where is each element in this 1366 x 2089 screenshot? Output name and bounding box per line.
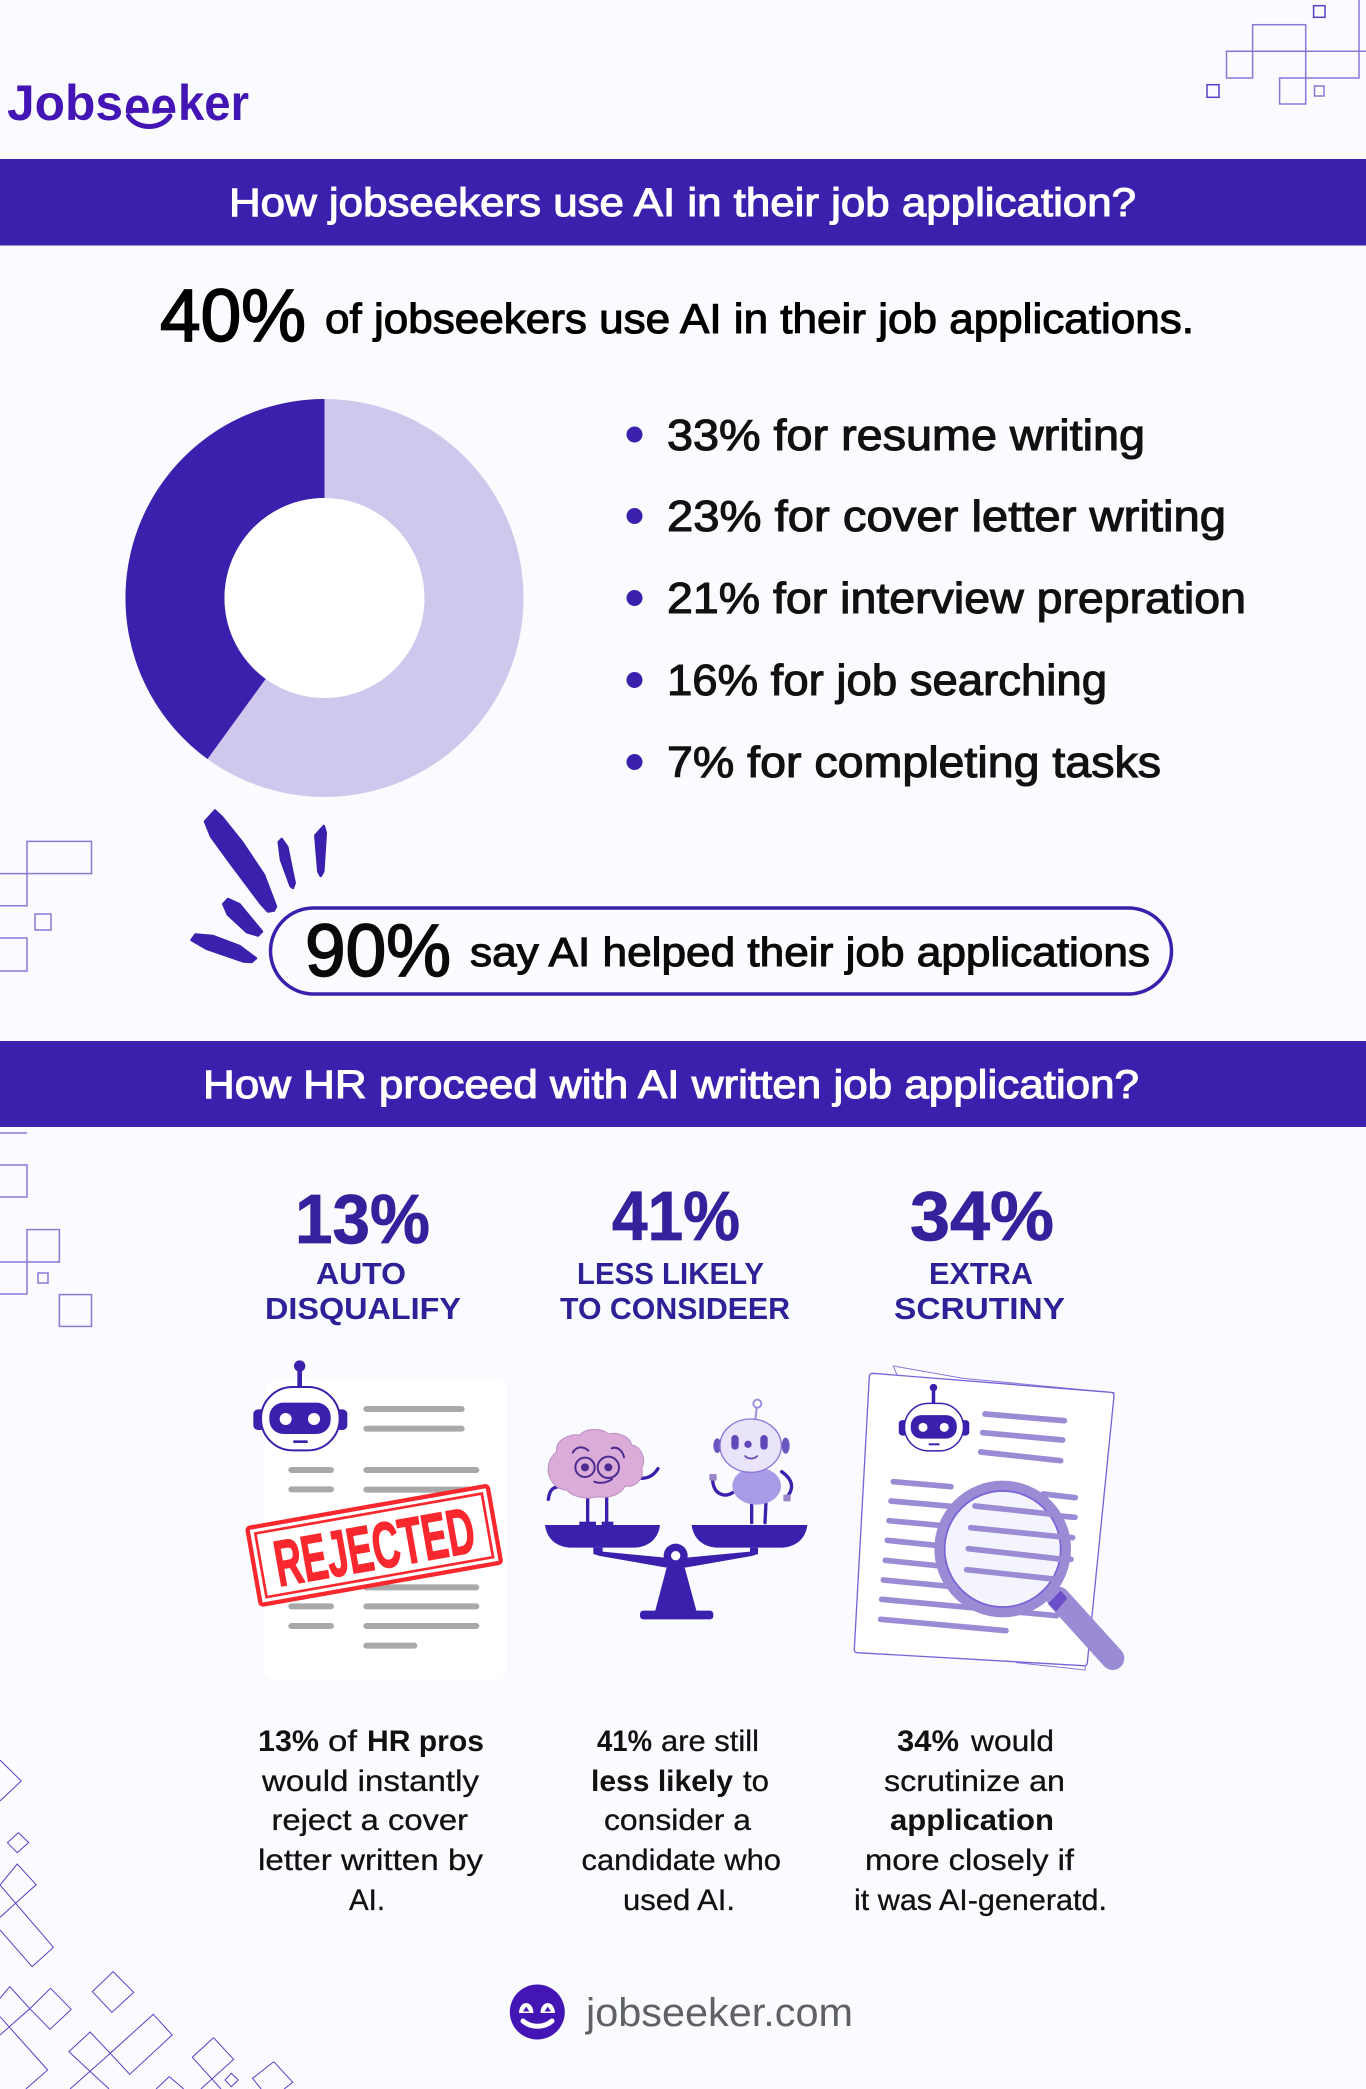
text block: 13% of HR pros — [258, 1725, 484, 1917]
text block: 41% less likely: 41% — [597, 1725, 652, 1758]
stat: 13% auto disqualify — [265, 1180, 461, 1326]
text block: 41% less likely: consider a — [604, 1804, 751, 1837]
text block: 41% less likely: used AI. — [623, 1884, 735, 1917]
list: AI usage breakdown: 7% for completing tasks — [667, 738, 1161, 787]
stat: 13% auto disqualify: 13% — [295, 1180, 430, 1258]
stat: 41% less likely to consider: 41% — [612, 1177, 740, 1255]
callout: 90% say AI helped: say AI helped their job applications — [470, 929, 1150, 975]
headline: 40% of jobseekers — [160, 274, 1194, 357]
text block: 41% less likely: to — [743, 1765, 769, 1798]
text block: 13% of HR pros: AI. — [349, 1884, 385, 1917]
logo: Jobseeker — [8, 84, 248, 129]
text block: 41% less likely — [582, 1725, 781, 1917]
logo: Jobseeker: ker — [178, 75, 249, 131]
stat: 41% less likely to consider: TO CONSIDEER — [560, 1291, 790, 1326]
headline: 40% of jobseekers: 40% — [160, 274, 306, 357]
text block: 13% of HR pros: letter written by — [258, 1844, 483, 1877]
logo: Jobseeker: Jobs — [7, 75, 123, 131]
text block: 34% would scrutinize: 34% — [897, 1725, 959, 1758]
icon: emphasis burst — [192, 810, 326, 962]
logo: Jobseeker: ee — [124, 75, 177, 140]
decoration: bottom left diamonds — [0, 1760, 293, 2089]
banner: how HR proceed — [0, 1041, 1366, 1127]
text block: 34% would scrutinize: would — [970, 1725, 1054, 1758]
illustration: document under magnifying glass — [854, 1366, 1114, 1670]
banner: how jobseekers use AI: How jobseekers use AI in their job application? — [229, 181, 1136, 225]
list: AI usage breakdown: 23% for cover letter writing — [667, 492, 1226, 541]
decoration: left middle squares — [0, 841, 92, 1326]
text block: 13% of HR pros: would instantly — [261, 1765, 479, 1798]
donut chart: 40 percent — [125, 399, 524, 797]
footer: jobseeker.com with smiley icon: jobseeker.com — [585, 1991, 853, 2035]
stat: 41% less likely to consider: LESS LIKELY — [577, 1256, 764, 1291]
stat: 13% auto disqualify: AUTO — [316, 1256, 406, 1291]
text block: 34% would scrutinize — [854, 1725, 1107, 1917]
stat: 13% auto disqualify: DISQUALIFY — [265, 1291, 461, 1326]
stat: 41% less likely to consider — [560, 1177, 790, 1326]
callout: 90% say AI helped: 90% — [305, 909, 451, 992]
text block: 13% of HR pros: of — [328, 1725, 358, 1758]
stat: 34% extra scrutiny: EXTRA — [929, 1256, 1033, 1291]
text block: 13% of HR pros: 13% — [258, 1725, 319, 1758]
headline: 40% of jobseekers: of jobseekers use AI in their job applications. — [325, 295, 1194, 342]
illustration: brain and robot on scale — [545, 1400, 807, 1619]
list: AI usage breakdown: 16% for job searching — [667, 656, 1107, 705]
banner: how HR proceed: How HR proceed with AI written job application? — [203, 1063, 1139, 1107]
footer: jobseeker.com with smiley icon — [510, 1984, 853, 2040]
text block: 41% less likely: less likely — [591, 1765, 733, 1798]
list: AI usage breakdown — [626, 411, 1246, 787]
list: AI usage breakdown: 21% for interview prepration — [667, 574, 1246, 623]
text block: 34% would scrutinize: it was AI-generatd. — [854, 1884, 1107, 1917]
list: AI usage breakdown: 33% for resume writing — [667, 411, 1145, 460]
callout: 90% say AI helped — [270, 908, 1172, 994]
illustration: rejected resume — [247, 1360, 506, 1680]
text block: 34% would scrutinize: scrutinize an — [884, 1765, 1065, 1798]
stat: 34% extra scrutiny — [894, 1177, 1065, 1326]
text block: 41% less likely: are still — [661, 1725, 759, 1758]
text block: 34% would scrutinize: application — [890, 1804, 1054, 1837]
stat: 34% extra scrutiny: 34% — [910, 1177, 1054, 1255]
text block: 13% of HR pros: HR pros — [367, 1725, 484, 1758]
text block: 13% of HR pros: reject a cover — [272, 1804, 468, 1837]
stat: 34% extra scrutiny: SCRUTINY — [894, 1291, 1065, 1326]
illustration: rejected resume: REJECTED — [269, 1493, 480, 1600]
text block: 41% less likely: candidate who — [582, 1844, 781, 1877]
text block: 34% would scrutinize: more closely if — [865, 1844, 1075, 1877]
decoration: top right squares — [1207, 0, 1366, 104]
banner: how jobseekers use AI — [0, 159, 1366, 246]
